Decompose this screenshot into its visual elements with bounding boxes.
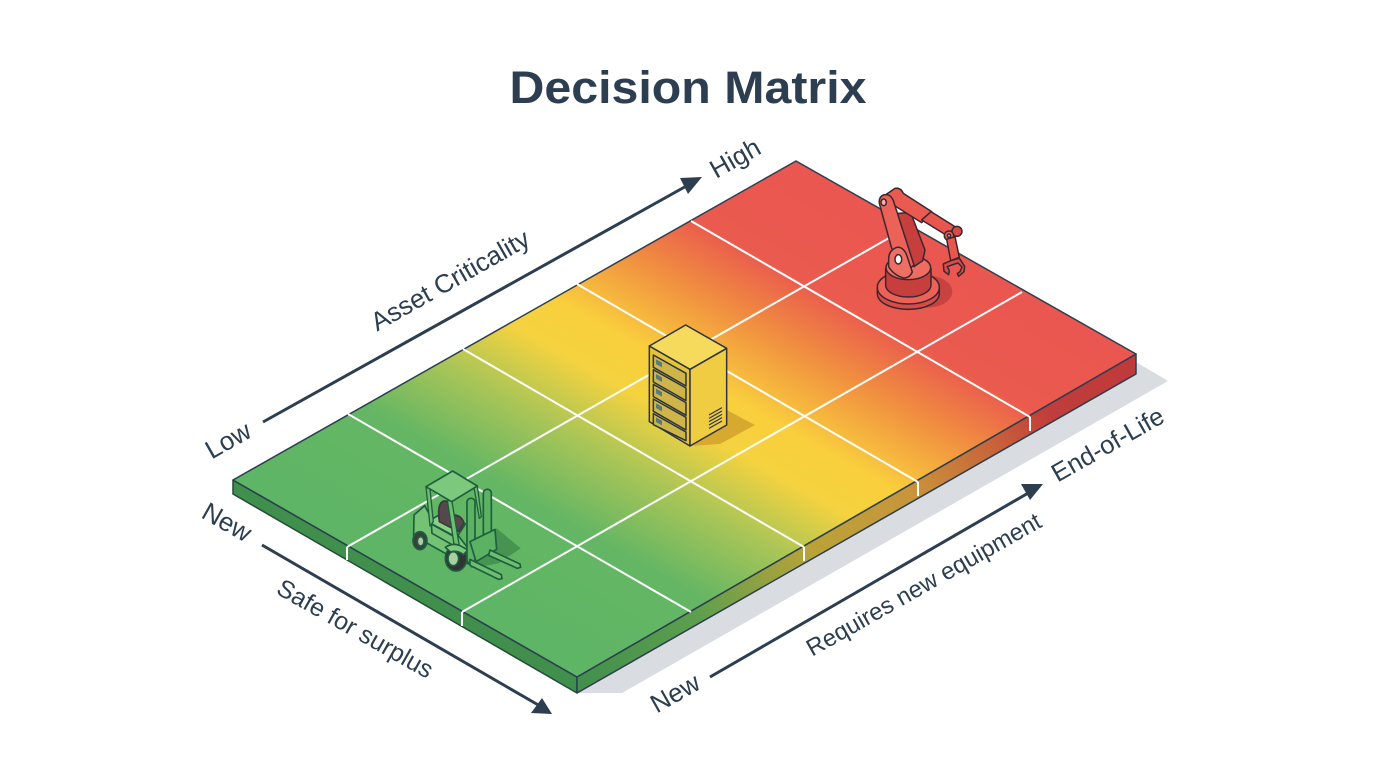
icon: server rack <box>649 325 755 446</box>
label: High: High <box>704 132 766 184</box>
label: New (right axis): New <box>645 667 705 719</box>
label: Requires new equipment: Requires new equipment <box>802 508 1046 662</box>
right side face <box>577 354 1136 693</box>
label: End-of-Life: End-of-Life <box>1047 402 1169 488</box>
label: Asset Criticality: Asset Criticality <box>365 223 535 337</box>
top surface gradient <box>233 161 1136 677</box>
matrix platform <box>233 161 1136 693</box>
grid lines <box>347 221 1030 626</box>
icon: robot arm <box>877 188 965 309</box>
icon: forklift <box>413 471 521 579</box>
label: Low: Low <box>200 415 256 465</box>
axis arrow: asset criticality <box>263 177 702 422</box>
label: New (left axis): New <box>197 496 257 548</box>
label: Safe for surplus: Safe for surplus <box>272 574 438 684</box>
left side face <box>233 480 577 693</box>
floor shadow <box>577 362 1168 693</box>
title: Decision Matrix <box>510 62 866 113</box>
axis arrow: safe for surplus <box>262 545 552 714</box>
axis arrow: requires new equipment <box>710 484 1043 677</box>
